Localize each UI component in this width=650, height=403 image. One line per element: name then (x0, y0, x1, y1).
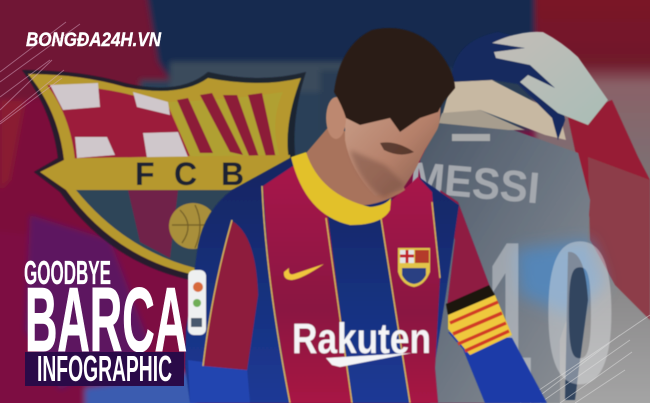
back-view collar (438, 110, 525, 130)
player sleeve (204, 221, 258, 370)
crest gold body (28, 74, 301, 275)
crest stripes (168, 92, 283, 163)
player stubble shadow (350, 150, 405, 198)
back-view name: MESSI (408, 153, 542, 213)
decorative streaks top left (0, 22, 80, 124)
player armband (446, 285, 512, 355)
player eye (380, 142, 414, 155)
crest white quarters (50, 83, 188, 158)
back-view hair (452, 32, 565, 140)
back-view forearm (588, 157, 650, 320)
player Nike swoosh (284, 264, 324, 280)
FC Barcelona crest (22, 70, 306, 281)
player torso base (185, 157, 459, 403)
back-view shirt tag (452, 134, 490, 141)
player La Liga patch (188, 270, 206, 335)
crest upper-left cross field (47, 85, 190, 159)
player ear (326, 97, 346, 139)
back-view hand (492, 32, 608, 125)
title: infographic: INFOGRAPHIC (37, 348, 172, 389)
back-view upper red sleeve (568, 100, 650, 240)
player gold piping (203, 186, 440, 403)
website logo: BONGĐA24H.VN (26, 30, 162, 51)
infographic cover: BARCA (25, 270, 187, 371)
back-view shirt (420, 123, 590, 403)
player crimson panel left (263, 164, 352, 403)
player lower arm (448, 332, 547, 403)
crest letters: FCB (135, 156, 244, 192)
player face (345, 95, 441, 196)
title block (24, 254, 187, 389)
sponsor wordmark: Rakuten (292, 315, 431, 363)
title bar (25, 352, 184, 386)
foreground player (185, 28, 547, 403)
back-view fold (565, 252, 588, 400)
sponsor underline swoosh (326, 353, 412, 367)
crest FCB band (42, 155, 292, 192)
back-view player (408, 32, 650, 403)
title: goodbye: GOODBYE (24, 254, 111, 291)
back-view blue paint (515, 240, 605, 315)
player collar (291, 152, 391, 225)
player undershirt sleeve (188, 360, 250, 403)
player hair (334, 28, 455, 132)
decorative streaks bottom right (520, 315, 650, 403)
crest football (169, 203, 217, 249)
back-view neck (442, 80, 566, 140)
crest lower field (76, 190, 256, 268)
crest dark outline (22, 70, 306, 281)
player crimson panel right (380, 177, 440, 403)
crest red stripes lower (128, 190, 178, 258)
player neck (300, 125, 405, 206)
player club crest (398, 248, 430, 287)
player right sleeve (440, 190, 490, 307)
